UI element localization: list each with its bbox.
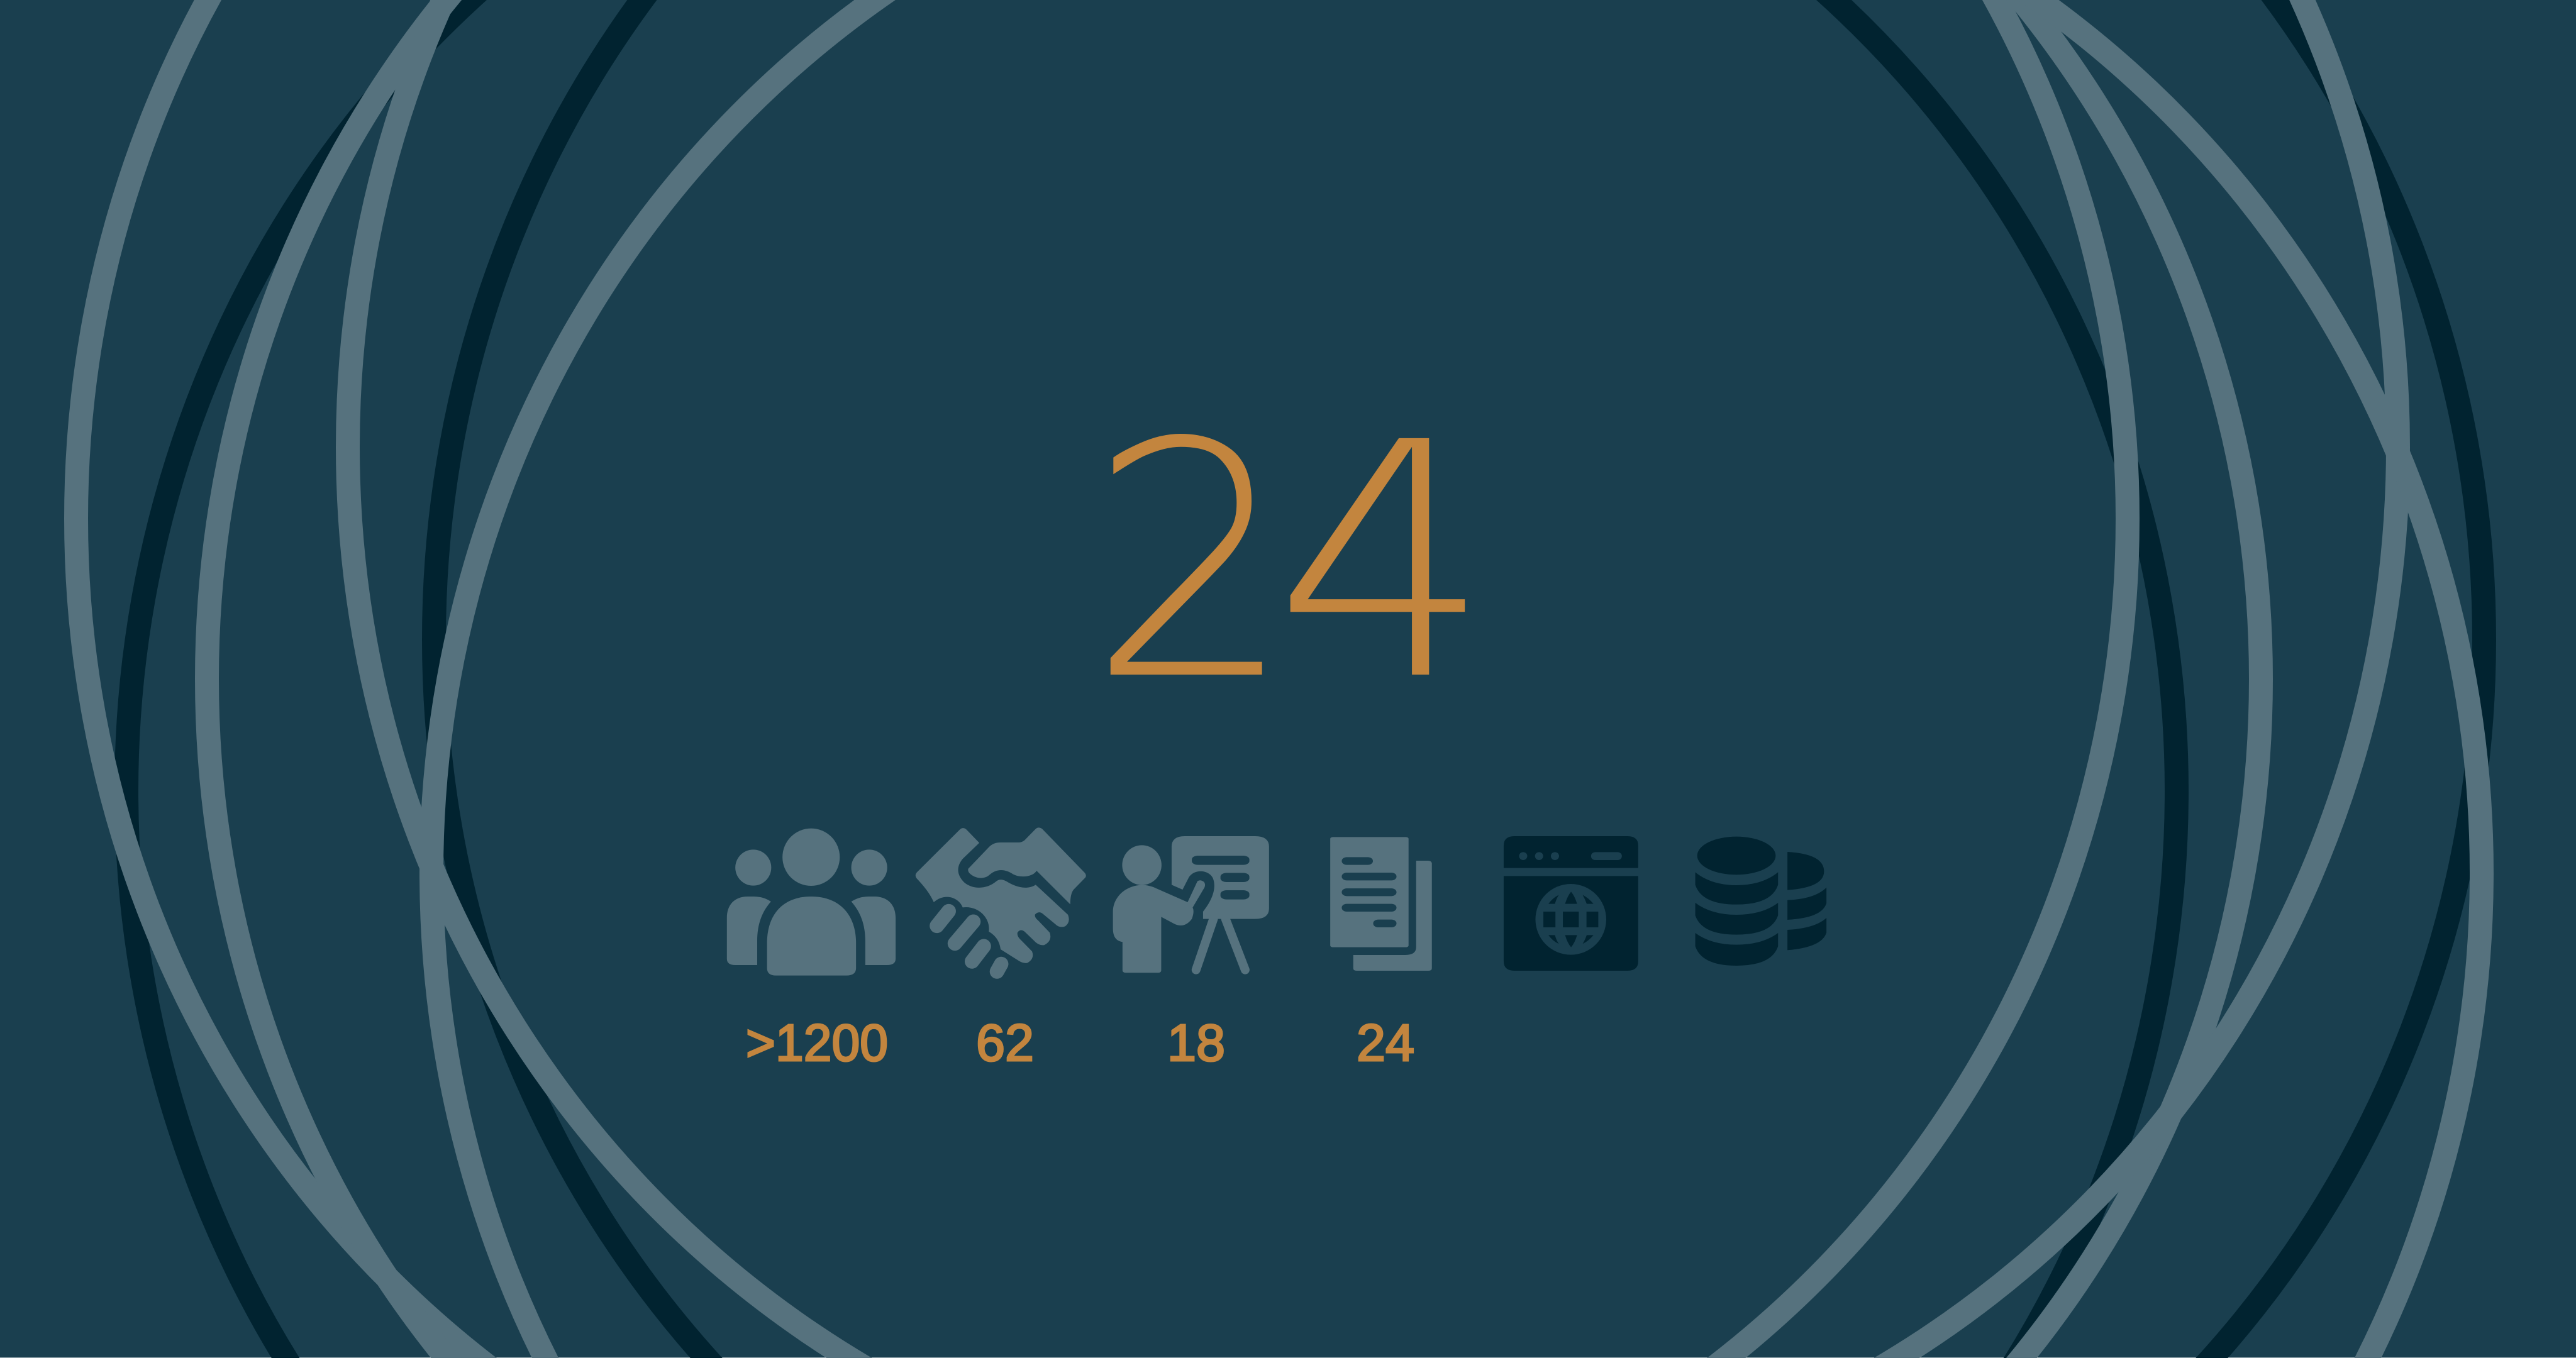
icon: coin stack (1696, 837, 1826, 966)
icon: handshake (916, 827, 1086, 971)
label: 24: 24 (1357, 1013, 1414, 1072)
big number: 24: 4 (1274, 374, 1492, 751)
big number: 24 (1088, 373, 1492, 751)
label: 62: 62 (976, 1013, 1034, 1072)
icon: people (727, 829, 896, 976)
big number: 24: 2 (1088, 373, 1294, 751)
icon: documents (1330, 837, 1432, 971)
icon: browser with globe (1504, 836, 1638, 971)
label: 18: 18 (1167, 1013, 1225, 1072)
icon: presenter at board (1113, 836, 1269, 973)
label: >1200: >1200 (746, 1013, 888, 1072)
